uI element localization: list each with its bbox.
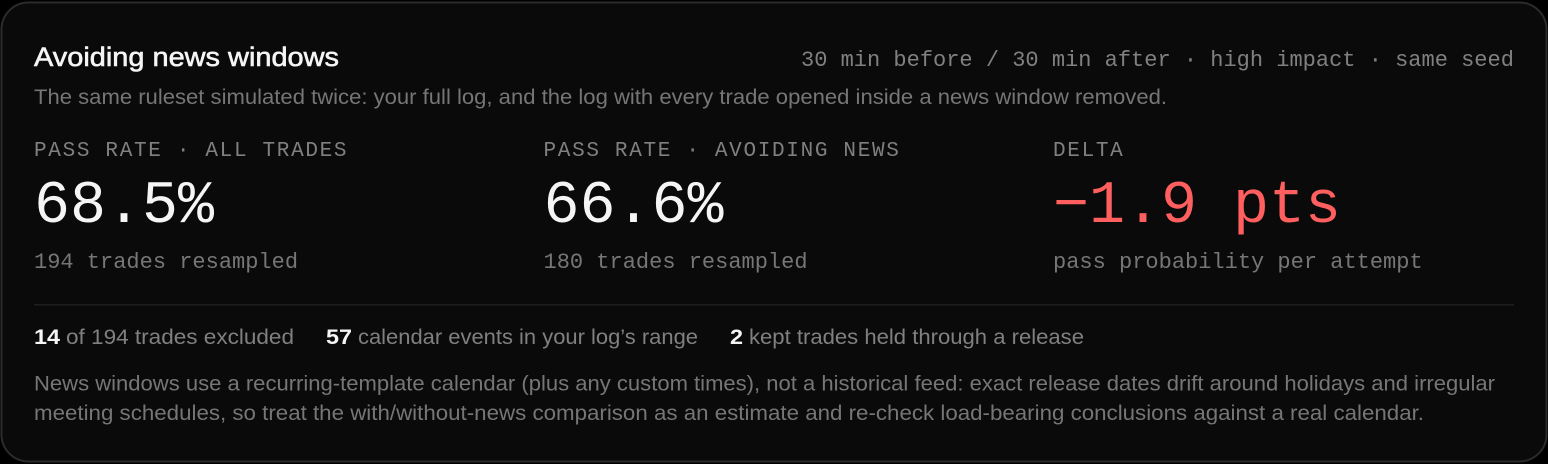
- metric: delta: [1053, 140, 1423, 275]
- metric: pass rate avoiding news: [544, 140, 901, 275]
- stat: trades excluded: of 194 trades excluded: [66, 326, 294, 349]
- stat: held through a release: 2: [730, 326, 743, 349]
- methodology note: News windows use a recurring-template calendar (plus any custom times), not a historical feed: exact release dates drift around holidays and irregular: [34, 372, 1495, 396]
- stat: calendar events: calendar events in your log’s range: [358, 326, 698, 349]
- metric: pass rate avoiding news: 180 trades resampled: [544, 250, 808, 275]
- stat: calendar events: 57: [326, 326, 352, 349]
- metric: delta: pass probability per attempt: [1053, 250, 1423, 275]
- metric: pass rate avoiding news: PASS RATE · AVOIDING NEWS: [544, 140, 901, 163]
- metric: pass rate all trades: 68.5%: [34, 173, 215, 241]
- stat: held through a release: kept trades held through a release: [749, 326, 1084, 349]
- metric: pass rate all trades: 194 trades resampled: [34, 250, 298, 275]
- stat: trades excluded: 14: [34, 326, 60, 349]
- metric: delta: DELTA: [1053, 140, 1124, 163]
- metric: pass rate all trades: PASS RATE · ALL TRADES: [34, 140, 348, 163]
- heading: Avoiding news windows: [34, 42, 339, 72]
- metric: pass rate avoiding news: 66.6%: [544, 173, 725, 241]
- methodology note: meeting schedules, so treat the with/without-news comparison as an estimate and re-check load-bearing conclusions against a real calendar.: [34, 402, 1424, 425]
- metric: delta: −1.9 pts: [1053, 173, 1341, 241]
- metric: pass rate all trades: [34, 140, 348, 275]
- subtitle: The same ruleset simulated twice: your full log, and the log with every trade opened inside a news window removed.: [34, 86, 1167, 109]
- settings summary: 30 min before / 30 min after · high impact · same seed: [801, 48, 1514, 73]
- methodology note: [34, 372, 1495, 425]
